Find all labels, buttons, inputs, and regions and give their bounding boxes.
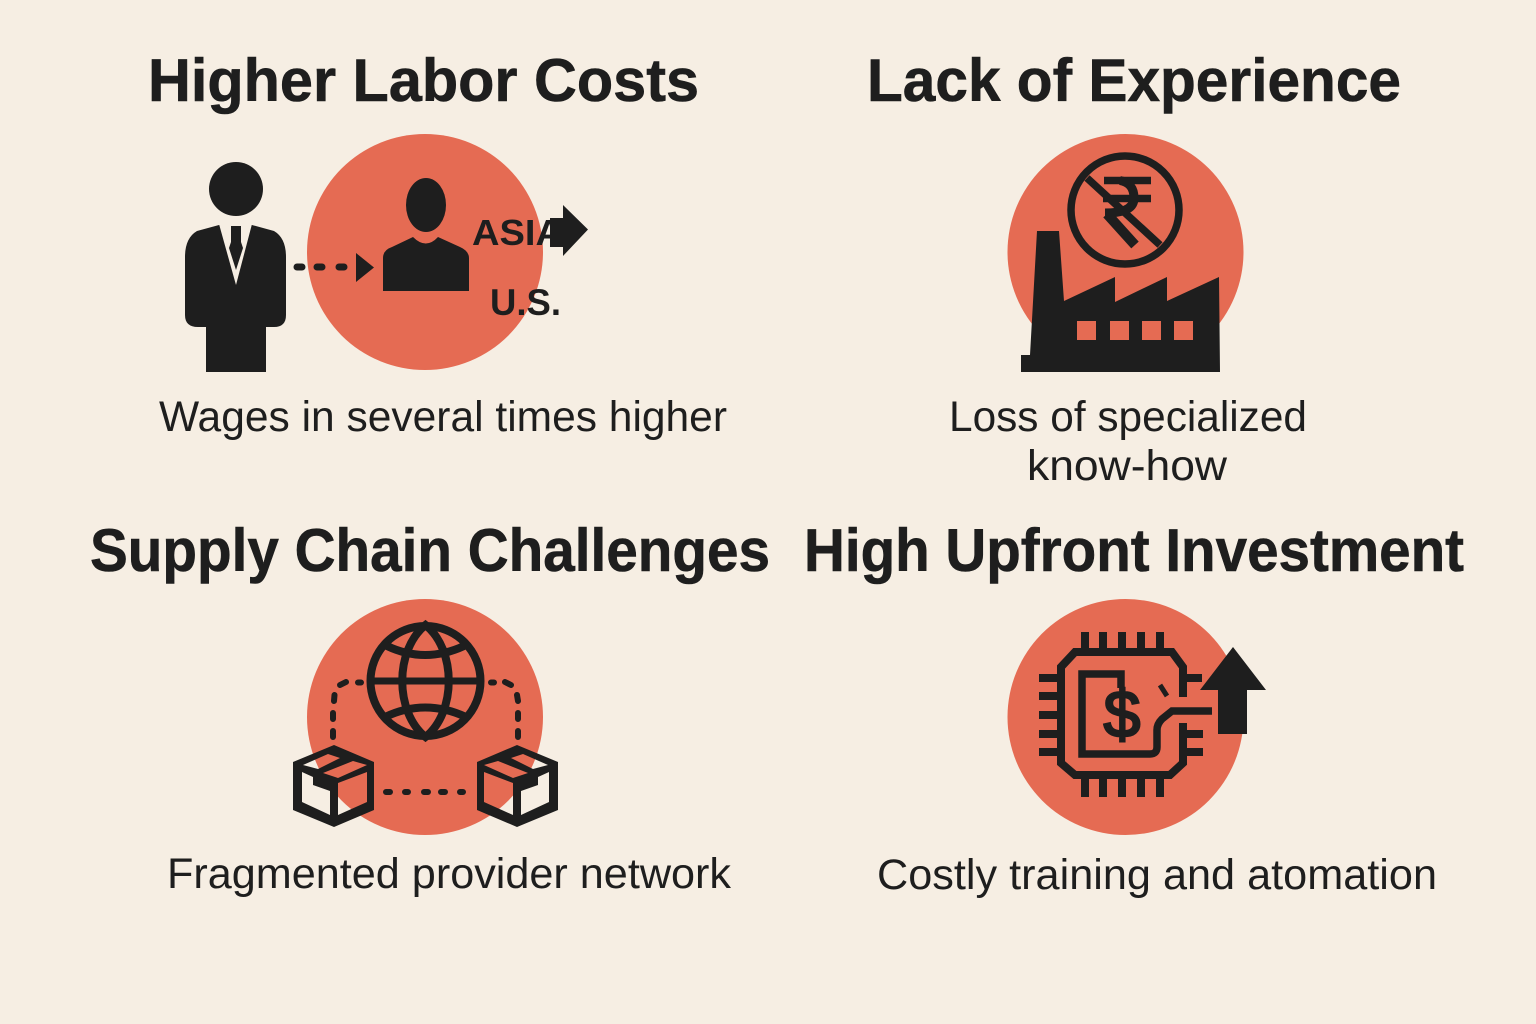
panel: supply chain challenges [90,517,770,898]
icon: man in suit [185,162,286,372]
coral circle [307,134,543,370]
coral circle [307,599,543,835]
icon: left box [293,745,374,827]
arrow: right from asia [550,205,588,256]
icon: factory [1021,231,1220,372]
panel: lack of experience [867,47,1401,490]
caption: wages: Wages in several times higher [159,393,727,441]
heading: high upfront investment: High Upfront Investment [804,517,1464,584]
connector: dotted link between boxes [386,789,463,795]
panel: high upfront investment [804,517,1464,899]
icon: microchip with dollar: $ [1104,677,1140,751]
coral circle [1008,599,1244,835]
label: ASIA: ASIA [472,212,563,253]
icon: globe [370,625,481,737]
caption: costly training: Costly training and atomation [877,851,1437,899]
caption: loss of know-how: Loss of specialized [949,393,1307,441]
icon: right box [477,745,558,827]
connector: dotted links to globe [333,682,518,737]
arrow: cost rising [1200,647,1266,734]
label: U.S.: U.S. [490,282,561,323]
icon: crossed-out rupee [1071,156,1179,264]
icon: worker bust [383,178,469,291]
heading: supply chain challenges: Supply Chain Challenges [90,517,770,584]
panel: higher labor costs [148,47,727,441]
icon: microchip with dollar [1039,632,1212,797]
heading: lack of experience: Lack of Experience [867,47,1401,114]
caption: fragmented network: Fragmented provider network [167,850,731,898]
arrow: dashed to worker [297,253,374,282]
heading: higher labor costs: Higher Labor Costs [148,47,699,114]
coral circle [1008,134,1244,370]
caption: loss of know-how [949,393,1307,490]
caption: loss of know-how: know-how [1027,442,1228,490]
